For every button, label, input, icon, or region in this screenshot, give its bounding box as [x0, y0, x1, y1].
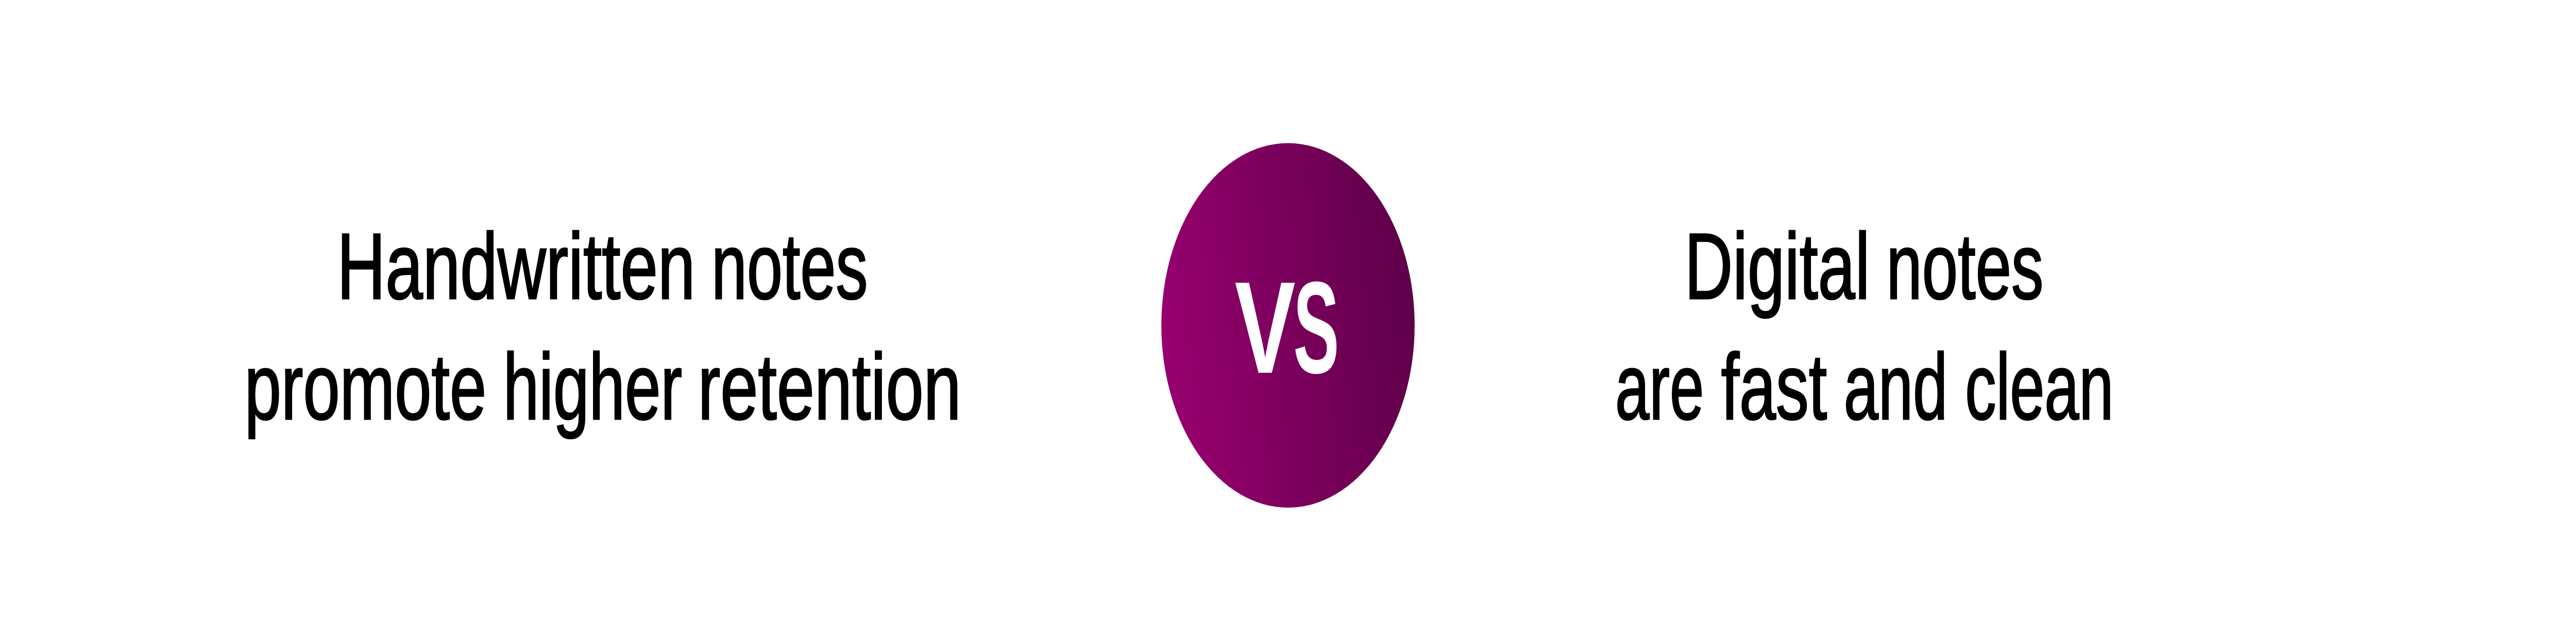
- text block: digital notes: are: [1615, 335, 1704, 439]
- text block: handwritten notes: [245, 214, 961, 439]
- text block: handwritten notes: retention: [698, 335, 961, 439]
- text block: handwritten notes: promote: [245, 335, 486, 439]
- text block: digital notes: fast: [1721, 335, 1827, 439]
- text block: digital notes: notes: [1886, 214, 2043, 319]
- icon: VS badge: S: [1293, 255, 1339, 401]
- text block: handwritten notes: higher: [503, 335, 682, 439]
- text block: digital notes: and: [1844, 335, 1947, 439]
- text block: handwritten notes: notes: [711, 214, 868, 319]
- text block: handwritten notes: Handwritten: [337, 214, 695, 319]
- text block: digital notes: [1615, 214, 2113, 439]
- icon: VS badge: [1161, 143, 1415, 508]
- text block: digital notes: Digital: [1685, 214, 1870, 319]
- text block: digital notes: clean: [1965, 335, 2113, 439]
- icon: VS badge: V: [1235, 255, 1296, 401]
